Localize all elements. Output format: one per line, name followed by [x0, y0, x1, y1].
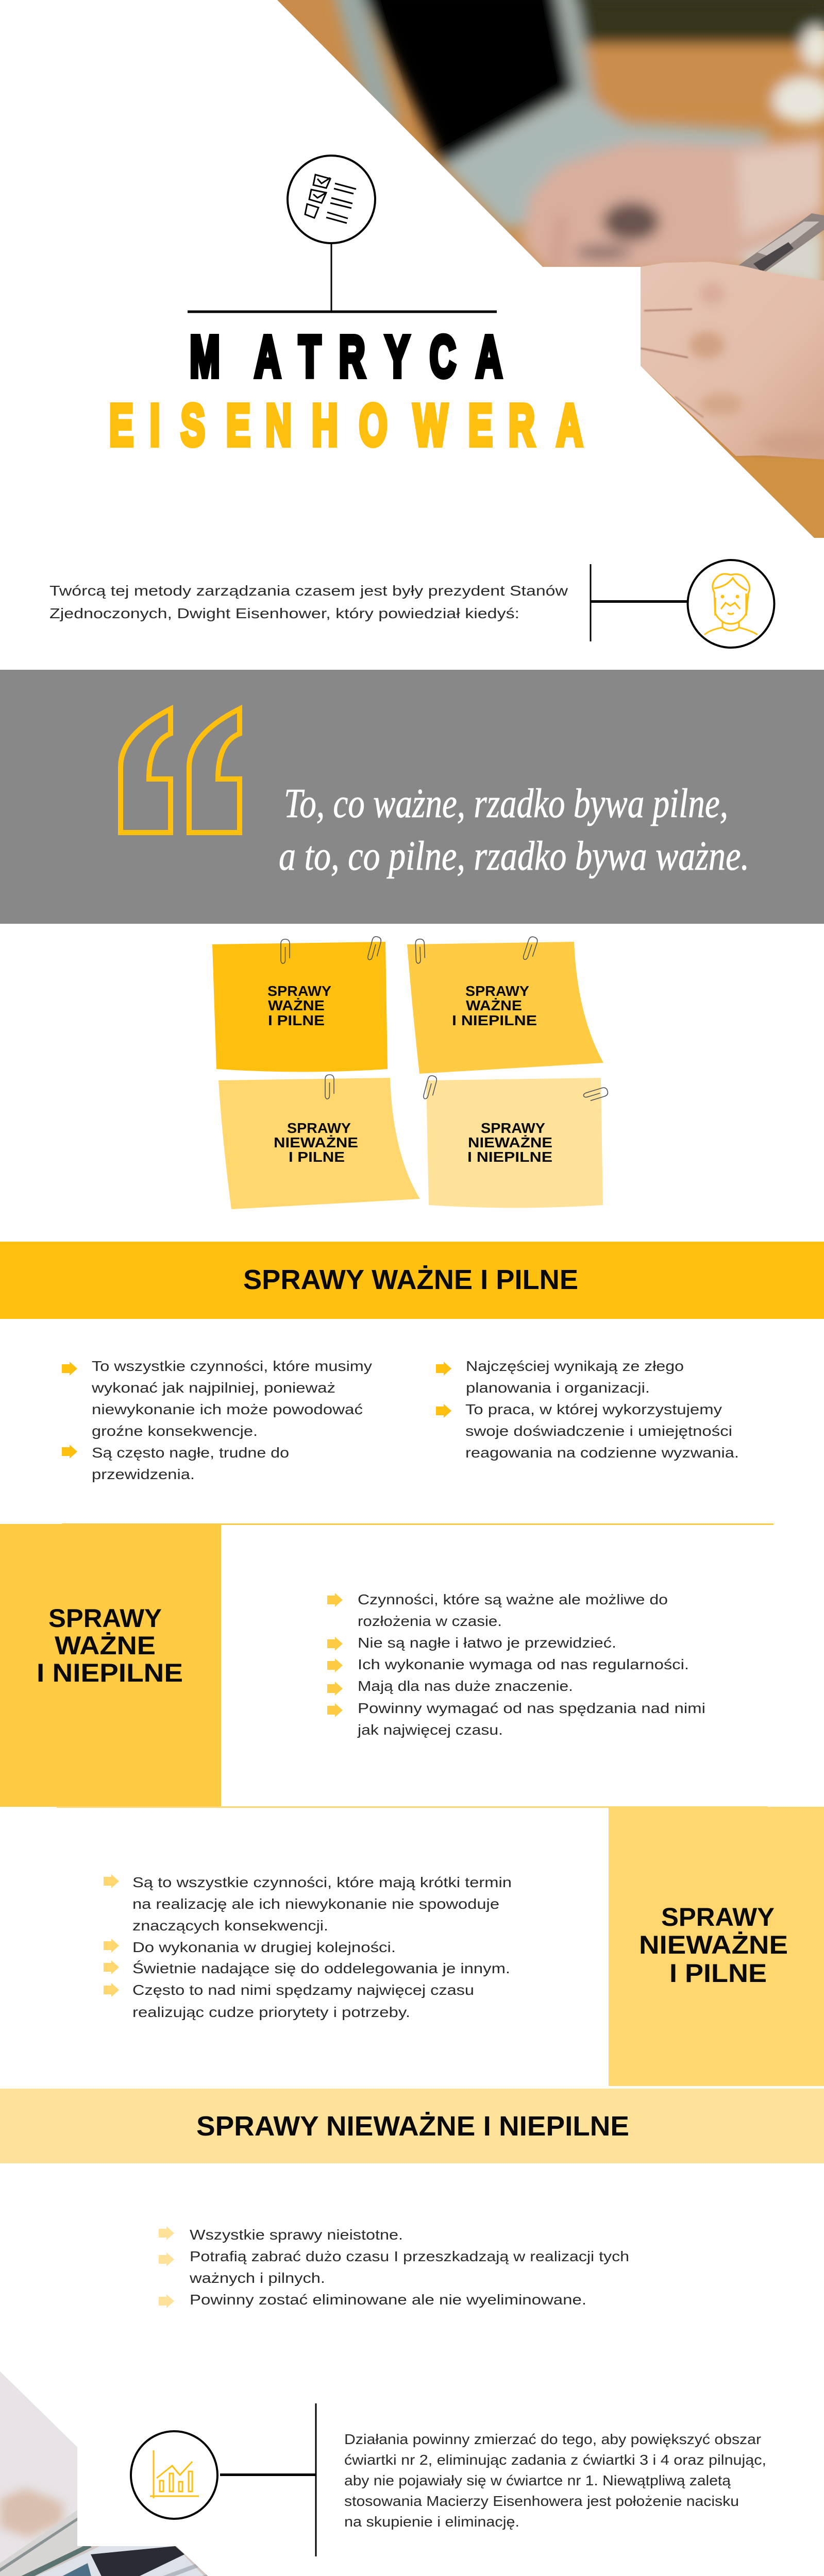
closing text: na skupienie i eliminację. [344, 2514, 519, 2530]
side title: SPRAWY [661, 1903, 775, 1931]
bullet list right: planowania i organizacji. [466, 1380, 650, 1396]
side title: I PILNE [669, 1959, 767, 1988]
closing text: Działania powinny zmierzać do tego, aby powiększyć obszar [344, 2431, 761, 2447]
bullet list right [436, 1358, 739, 1461]
panel: sprawy ważne i pilne [0, 1242, 824, 1482]
quote text: To, co ważne, rzadko bywa pilne, [284, 781, 728, 826]
icon: checklist in circle [288, 156, 375, 243]
title connector lines [188, 244, 497, 313]
bullet list right: swoje doświadczenie i umiejętności [465, 1423, 732, 1439]
sticky note: nieważne i pilne: NIEWAŻNE [274, 1134, 358, 1150]
side title: WAŻNE [55, 1631, 156, 1660]
sticky note: ważne i pilne: SPRAWY [267, 983, 331, 999]
sticky note: ważne i niepilne: I NIEPILNE [452, 1012, 537, 1028]
bullet list left: To wszystkie czynności, które musimy [92, 1358, 372, 1374]
sticky note: nieważne i pilne: SPRAWY [287, 1120, 351, 1136]
bullet list: jak najwięcej czasu. [357, 1722, 503, 1738]
sticky note: ważne i niepilne [407, 936, 603, 1074]
connector to portrait [590, 564, 687, 641]
bullet list: Nie są nagłe i łatwo je przewidzieć. [358, 1635, 616, 1651]
panel: sprawy nieważne i pilne [104, 1807, 824, 2086]
title: EISENHOWERA: EISENHOWERA [109, 393, 583, 457]
sticky note: nieważne i niepilne [423, 1075, 609, 1208]
icon: quotation marks [121, 709, 240, 833]
sticky note: ważne i pilne [212, 936, 388, 1072]
sticky note: nieważne i pilne: I PILNE [289, 1149, 345, 1165]
bullet list: Powinny zostać eliminowane ale nie wyeliminowane. [190, 2292, 586, 2308]
photo: hands on laptop [273, 0, 824, 538]
bullet list: Są to wszystkie czynności, które mają krótki termin [132, 1874, 512, 1890]
closing text [344, 2431, 766, 2530]
bullet list right: Najczęściej wynikają ze złego [466, 1358, 684, 1374]
bullet list: Potrafią zabrać dużo czasu I przeszkadzają w realizacji tych [190, 2248, 629, 2264]
panel: sprawy nieważne i niepilne [0, 2089, 824, 2308]
sticky note: ważne i pilne: WAŻNE [268, 997, 325, 1013]
intro text [49, 583, 568, 621]
sticky note: nieważne i pilne [218, 1075, 420, 1209]
bullet list: na realizację ale ich niewykonanie nie spowoduje [132, 1896, 499, 1912]
sticky note: nieważne i niepilne: I NIEPILNE [467, 1149, 552, 1165]
closing text: ćwiartki nr 2, eliminując zadania z ćwiartki 3 i 4 oraz pilnując, [344, 2452, 766, 2468]
sticky note: nieważne i niepilne: NIEWAŻNE [468, 1134, 552, 1150]
sticky note: nieważne i niepilne: SPRAWY [481, 1120, 545, 1136]
bullet list: Świetnie nadające się do oddelegowania je innym. [132, 1960, 510, 1976]
photo: hand on tablet [0, 2371, 208, 2576]
title: MATRYCA: MATRYCA [190, 324, 502, 389]
sticky note: ważne i pilne: I PILNE [268, 1012, 325, 1028]
sticky note: ważne i niepilne: SPRAWY [465, 983, 529, 999]
side title [639, 1903, 788, 1988]
bullet list: znaczących konsekwencji. [132, 1918, 328, 1934]
bullet list right: reagowania na codzienne wyzwania. [465, 1445, 739, 1461]
heading: SPRAWY NIEWAŻNE I NIEPILNE [196, 2111, 629, 2142]
panel: sprawy ważne i niepilne [0, 1524, 705, 1807]
side title: NIEWAŻNE [639, 1930, 788, 1959]
bullet list: Często to nad nimi spędzamy najwięcej czasu [132, 1982, 474, 1998]
bullet list left: Są często nagłe, trudne do [92, 1445, 289, 1461]
side title: I NIEPILNE [37, 1658, 183, 1687]
bullet list: Mają dla nas duże znaczenie. [358, 1678, 573, 1694]
bullet list right: To praca, w której wykorzystujemy [465, 1401, 722, 1417]
bullet list left: przewidzenia. [92, 1466, 195, 1482]
bullet list left: groźne konsekwencje. [92, 1423, 258, 1439]
bullet list [104, 1874, 512, 2020]
bullet list [159, 2226, 629, 2308]
intro text: Zjednoczonych, Dwight Eisenhower, który powiedział kiedyś: [49, 605, 519, 621]
heading: SPRAWY WAŻNE I PILNE [243, 1264, 578, 1295]
icon: Eisenhower portrait [687, 560, 774, 648]
bullet list: Czynności, które są ważne ale możliwe do [358, 1591, 668, 1607]
closing text: aby nie pojawiały się w ćwiartce nr 1. Niewątpliwą zaletą [344, 2472, 731, 2488]
bullet list left: wykonać jak najpilniej, ponieważ [91, 1380, 335, 1396]
bullet list: Do wykonania w drugiej kolejności. [132, 1939, 396, 1955]
bullet list left: niewykonanie ich może powodować [92, 1401, 363, 1417]
bullet list left [62, 1358, 372, 1482]
side title: SPRAWY [48, 1604, 162, 1633]
icon: chart in circle [131, 2431, 217, 2519]
connector to text [220, 2403, 316, 2556]
bullet list [327, 1591, 705, 1738]
bullet list: Wszystkie sprawy nieistotne. [190, 2227, 403, 2243]
panel: quote band [0, 670, 824, 924]
bullet list: ważnych i pilnych. [189, 2270, 325, 2286]
side title [37, 1604, 183, 1687]
bullet list: Powinny wymagać od nas spędzania nad nimi [358, 1700, 705, 1716]
bullet list: rozłożenia w czasie. [358, 1613, 502, 1629]
closing text: stosowania Macierzy Eisenhowera jest położenie nacisku [344, 2493, 739, 2509]
bullet list: realizując cudze priorytety i potrzeby. [132, 2004, 410, 2020]
bullet list: Ich wykonanie wymaga od nas regularności. [358, 1656, 689, 1672]
quote text [279, 781, 749, 879]
intro text: Twórcą tej metody zarządzania czasem jest były prezydent Stanów [49, 583, 568, 599]
sticky note: ważne i niepilne: WAŻNE [466, 997, 522, 1013]
